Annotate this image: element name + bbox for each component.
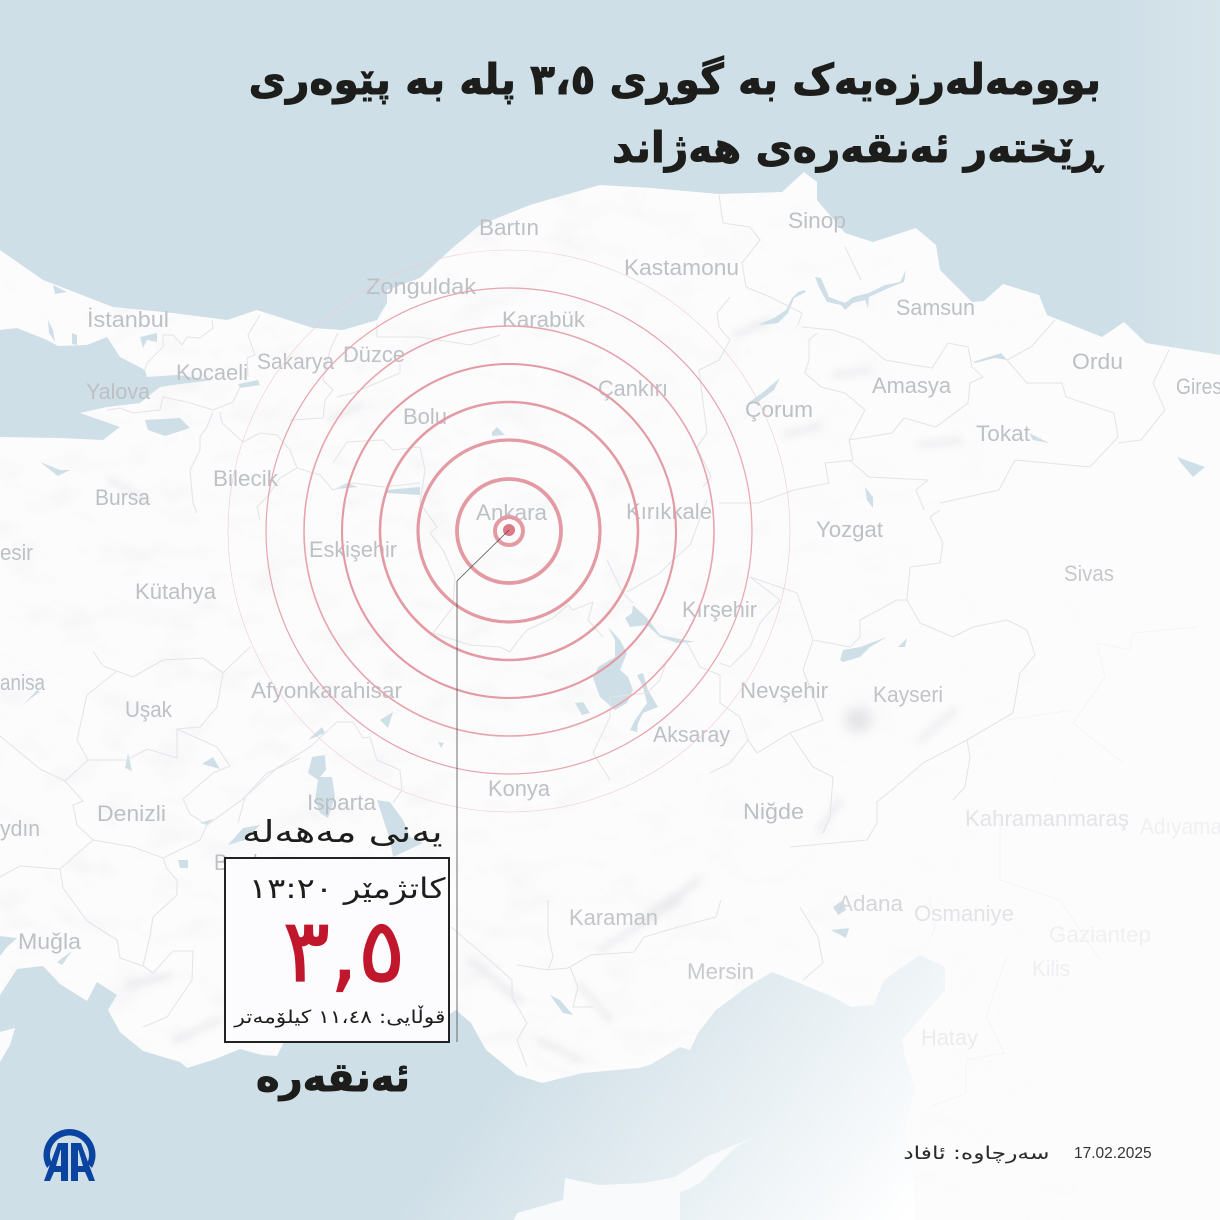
terrain shading — [112, 320, 958, 1062]
label: Isparta: Isparta — [307, 790, 377, 815]
label: Kocaeli: Kocaeli — [176, 360, 248, 385]
label: Hatay: Hatay — [921, 1025, 978, 1050]
label: Kayseri: Kayseri — [873, 682, 943, 707]
label: Amasya: Amasya — [872, 373, 952, 398]
province borders — [0, 195, 1169, 1067]
label: Kastamonu: Kastamonu — [624, 255, 739, 280]
label: Karabük: Karabük — [502, 307, 586, 332]
far-east borders (faded) — [930, 627, 1197, 1107]
title line 2: ڕێختەر ئەنقەرەی هەژاند — [612, 123, 1101, 172]
label: Mersin: Mersin — [687, 959, 754, 984]
province name: ئەنقەرە — [256, 1055, 410, 1101]
label: Gaziantep: Gaziantep — [1049, 922, 1151, 947]
label: Sinop: Sinop — [788, 208, 846, 233]
label: Samsun: Samsun — [896, 295, 975, 320]
date: 17.02.2025 — [1074, 1145, 1152, 1162]
label: Sivas: Sivas — [1064, 561, 1114, 586]
epicentre dot — [503, 524, 515, 536]
label: Bursa: Bursa — [95, 485, 151, 510]
label: Burdur: Burdur — [214, 850, 276, 875]
label: Aksaray: Aksaray — [653, 722, 730, 747]
label: Muğla: Muğla — [18, 929, 82, 954]
label: Adana: Adana — [838, 891, 904, 916]
magnitude: ٣,٥ — [283, 899, 405, 1002]
label: Balıkesir: esir — [0, 540, 33, 565]
label: Kilis: Kilis — [1032, 956, 1070, 981]
depth: قوڵایی: ١١،٤٨ کیلۆمەتر — [234, 1007, 445, 1028]
callout box — [224, 857, 450, 1043]
label: Kütahya: Kütahya — [135, 579, 217, 604]
label: İstanbul: İstanbul — [87, 307, 169, 332]
land: Rhodes — [0, 1028, 15, 1062]
label: Çorum: Çorum — [745, 397, 813, 422]
label: Bolu: Bolu — [403, 404, 447, 429]
earthquake rings — [228, 250, 790, 812]
label: Osmaniye: Osmaniye — [914, 901, 1014, 926]
source: سەرچاوە: ئافاد — [904, 1143, 1050, 1164]
district name: یەنی مەهەلە — [243, 815, 443, 850]
label: Niğde: Niğde — [743, 799, 804, 824]
label: Yozgat: Yozgat — [816, 517, 883, 542]
label: Uşak: Uşak — [125, 697, 173, 722]
province labels — [0, 208, 1220, 1050]
label: Bilecik: Bilecik — [213, 466, 279, 491]
label: Denizli: Denizli — [97, 801, 166, 826]
title line 1: بوومەلەرزەیەک بە گوڕی ٣،٥ پلە بە پێوەری — [249, 55, 1101, 104]
label: Nevşehir: Nevşehir — [740, 678, 828, 703]
land: Marmara sea — [0, 328, 213, 440]
label: Tokat: Tokat — [976, 421, 1030, 446]
label: Sakarya: Sakarya — [257, 349, 335, 374]
land: Cyprus — [514, 1137, 754, 1220]
label: Çankırı: Çankırı — [598, 376, 668, 401]
label: Kırıkkale: Kırıkkale — [626, 499, 712, 524]
label: Afyonkarahisar: Afyonkarahisar — [251, 678, 402, 703]
label: Düzce: Düzce — [343, 342, 405, 367]
label: Kırşehir: Kırşehir — [682, 597, 757, 622]
lakes and rivers — [0, 270, 1205, 1015]
label: Karaman: Karaman — [569, 905, 658, 930]
label: Konya: Konya — [488, 776, 551, 801]
time: کاتژمێر ١٣:٢٠ — [248, 872, 445, 905]
leader line from epicentre to callout — [457, 530, 509, 1042]
label: Zonguldak: Zonguldak — [366, 274, 477, 299]
title — [249, 55, 1105, 173]
label: Bartın: Bartın — [479, 215, 539, 240]
label: Kahramanmaraş: Kahramanmaraş — [965, 806, 1129, 831]
label: Aydın: ydın — [0, 816, 40, 841]
label: Ankara: Ankara — [476, 500, 548, 525]
label: Yalova: Yalova — [86, 379, 151, 404]
label: Manisa: anisa — [0, 670, 46, 695]
label: Eskişehir: Eskişehir — [309, 537, 397, 562]
label: Ordu: Ordu — [1072, 349, 1123, 374]
